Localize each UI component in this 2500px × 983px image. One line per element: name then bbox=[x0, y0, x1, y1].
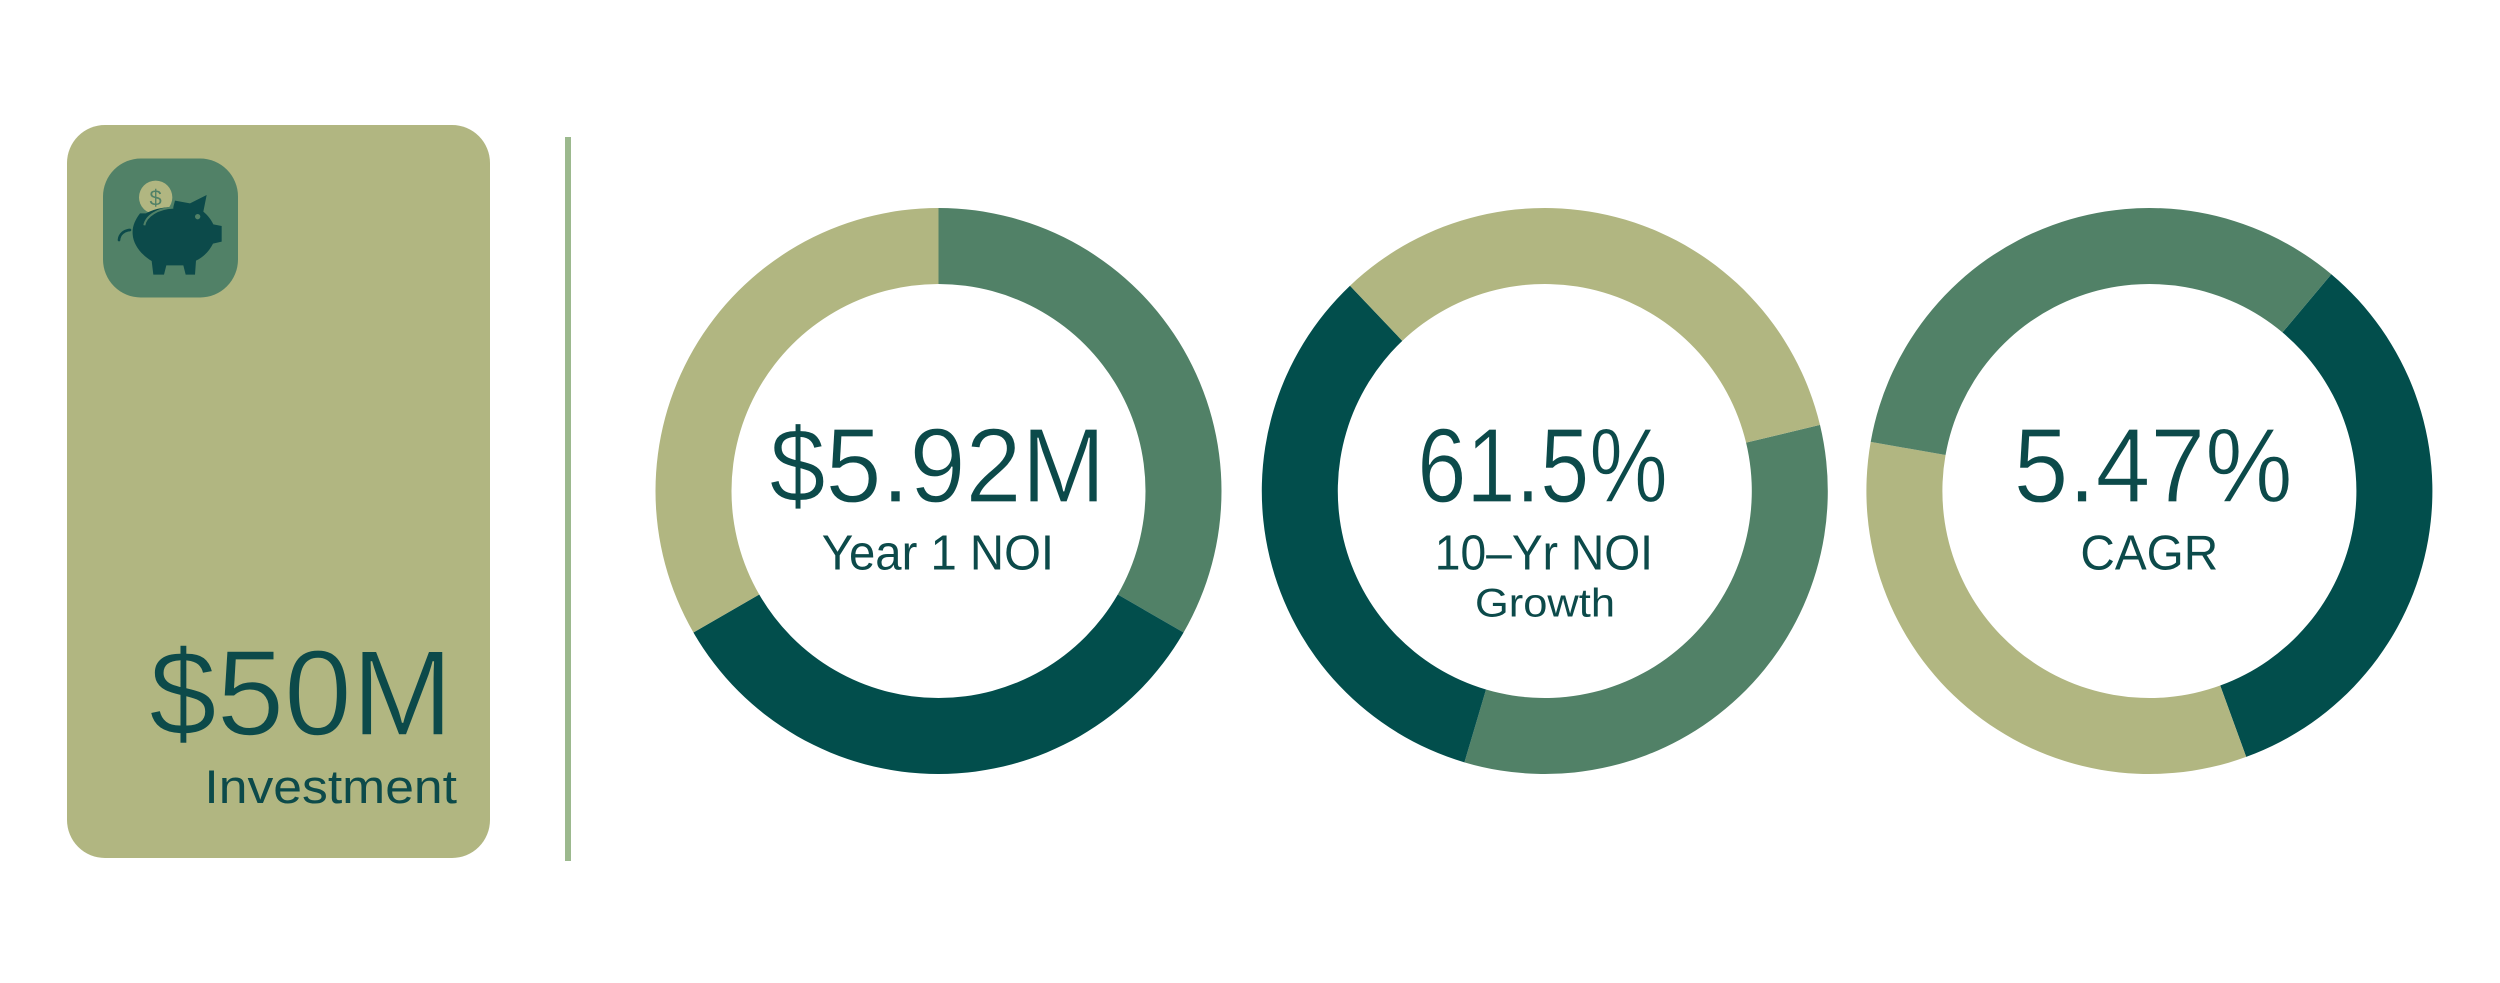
value: 5.47%: 5.47% bbox=[2014, 407, 2293, 525]
label: Growth: Growth bbox=[1475, 582, 1615, 626]
panel: CAGR donut bbox=[1866, 208, 2432, 774]
donut chart: 10-Yr NOI Growth bbox=[1262, 208, 1828, 774]
donut chart: Year 1 NOI bbox=[656, 208, 1221, 774]
value: $5.92M: $5.92M bbox=[770, 407, 1106, 525]
vertical divider bbox=[565, 137, 571, 861]
panel: Year 1 NOI donut bbox=[656, 208, 1221, 774]
label: Investment: Investment bbox=[204, 760, 457, 813]
donut chart: CAGR bbox=[1866, 208, 2432, 774]
label: 10-Yr NOI: 10–Yr NOI bbox=[1435, 527, 1653, 581]
panel: 10-Yr NOI Growth donut bbox=[1262, 208, 1828, 774]
label: CAGR: CAGR bbox=[2080, 527, 2218, 581]
value: 61.5%: 61.5% bbox=[1417, 407, 1668, 525]
icon: piggy bank bbox=[103, 158, 238, 298]
icon: piggy bank: $ bbox=[150, 185, 162, 210]
value: $50M: $50M bbox=[149, 625, 453, 761]
label: Year 1 NOI: Year 1 NOI bbox=[822, 527, 1054, 581]
panel: investment card bbox=[67, 125, 490, 858]
